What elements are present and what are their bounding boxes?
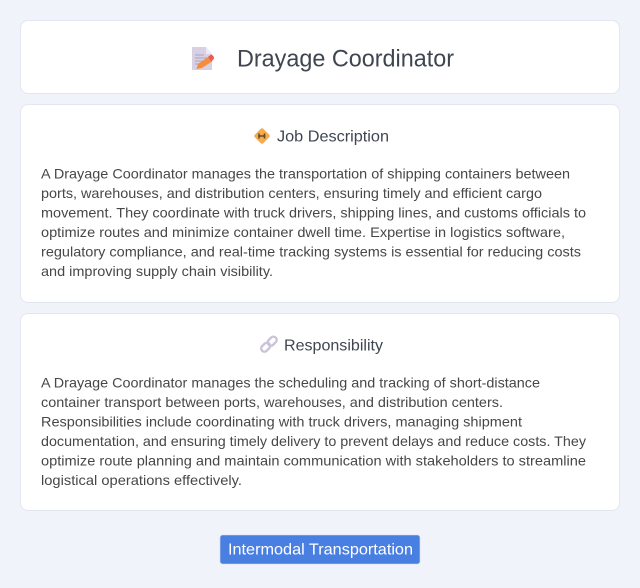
responsibility text: optimize route planning and maintain communication with stakeholders to streamline (41, 452, 586, 468)
tag button: intermodal transportation (220, 535, 420, 564)
icon: memo and pencil (192, 47, 214, 70)
job description text (41, 166, 586, 279)
responsibility text: container transport between ports, warehouses, and distribution centers. (41, 394, 503, 410)
panel: title card (20, 20, 620, 94)
responsibility text: A Drayage Coordinator manages the scheduling and tracking of short-distance (41, 374, 540, 390)
job description text: ports, warehouses, and distribution centers, ensuring timely and efficient cargo (41, 185, 542, 201)
panel: job description (20, 104, 620, 303)
job description text: A Drayage Coordinator manages the transportation of shipping containers between (41, 166, 570, 182)
job description text: regulatory compliance, and real-time tracking systems is essential for reducing costs (41, 244, 581, 260)
heading: job description: Job Description (277, 128, 389, 146)
icon: chain link (260, 335, 278, 353)
heading: responsibility: Responsibility (284, 338, 383, 354)
responsibility text: logistical operations effectively. (41, 472, 242, 488)
panel: responsibility (20, 313, 620, 511)
job description text: movement. They coordinate with truck drivers, shipping lines, and customs officials to (41, 204, 586, 220)
responsibility text: Responsibilities include coordinating with truck drivers, managing shipment (41, 414, 522, 430)
title: Drayage Coordinator (237, 46, 454, 72)
icon: construction diamond (254, 128, 270, 144)
job description text: and improving supply chain visibility. (41, 263, 273, 279)
responsibility text (41, 374, 586, 488)
job description text: optimize routes and minimize container dwell time. Expertise in logistics software, (41, 224, 565, 240)
responsibility text: documentation, and ensuring timely delivery to prevent delays and reduce costs. They (41, 433, 586, 449)
tag button: intermodal transportation: Intermodal Transportation (228, 542, 413, 558)
